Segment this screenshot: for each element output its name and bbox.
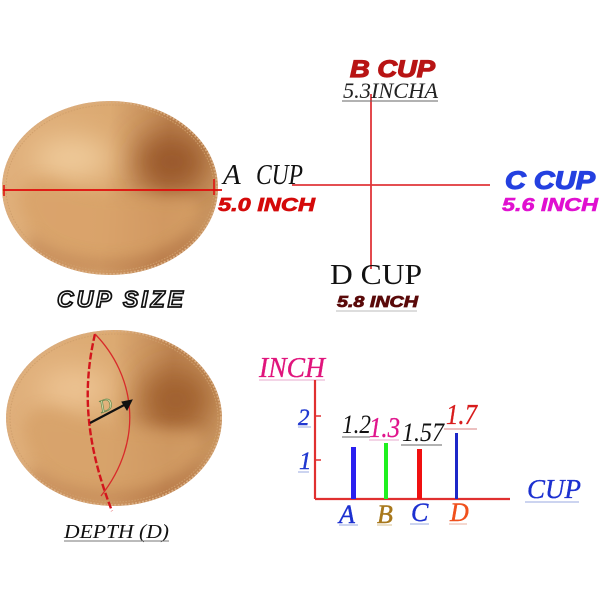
cup photo: top, cup size bbox=[2, 101, 218, 275]
cup photo: bottom, depth bbox=[6, 330, 222, 508]
label: 5.3 inch: 5.3INCHA bbox=[343, 78, 439, 103]
y tick: 1: 1 bbox=[299, 448, 312, 475]
label: A cup: A bbox=[221, 159, 241, 191]
bar: A bbox=[351, 447, 356, 499]
category: B: B bbox=[377, 500, 393, 529]
label: depth (D): DEPTH (D) bbox=[63, 521, 169, 543]
depth diagram: curves and arrow bbox=[88, 334, 132, 511]
label: D on arrow: D bbox=[95, 394, 115, 417]
label: D cup: D CUP bbox=[330, 259, 422, 291]
bar: C bbox=[417, 449, 422, 499]
label: C cup: C CUP bbox=[505, 167, 595, 195]
label: 5.8 inch: 5.8 INCH bbox=[337, 294, 419, 311]
heading: cup size: CUP SIZE bbox=[57, 286, 184, 312]
axis title: CUP: CUP bbox=[527, 474, 581, 504]
category: A: A bbox=[337, 500, 355, 529]
label: 5.6 inch: 5.6 INCH bbox=[502, 195, 599, 215]
y tick: 2: 2 bbox=[298, 405, 310, 430]
bar chart: depth by cup bbox=[258, 353, 581, 529]
bar: B bbox=[384, 443, 388, 499]
cross measuring lines bbox=[292, 94, 490, 269]
label: 5.0 inch: 5.0 INCH bbox=[218, 195, 316, 215]
category: C: C bbox=[411, 498, 429, 527]
axes bbox=[315, 380, 510, 499]
label: A cup bbox=[221, 159, 303, 191]
width measure line: A cup bbox=[3, 179, 222, 196]
bar: D bbox=[455, 433, 458, 499]
value: 1.2: 1.2 bbox=[342, 410, 371, 439]
label: A cup: CUP bbox=[256, 159, 303, 191]
value: 1.3: 1.3 bbox=[369, 413, 400, 444]
label: B cup: B CUP bbox=[350, 56, 436, 83]
value: 1.57: 1.57 bbox=[402, 418, 445, 447]
value: 1.7: 1.7 bbox=[446, 400, 478, 431]
axis title: INCH: INCH bbox=[258, 353, 327, 384]
category: D: D bbox=[449, 498, 469, 527]
